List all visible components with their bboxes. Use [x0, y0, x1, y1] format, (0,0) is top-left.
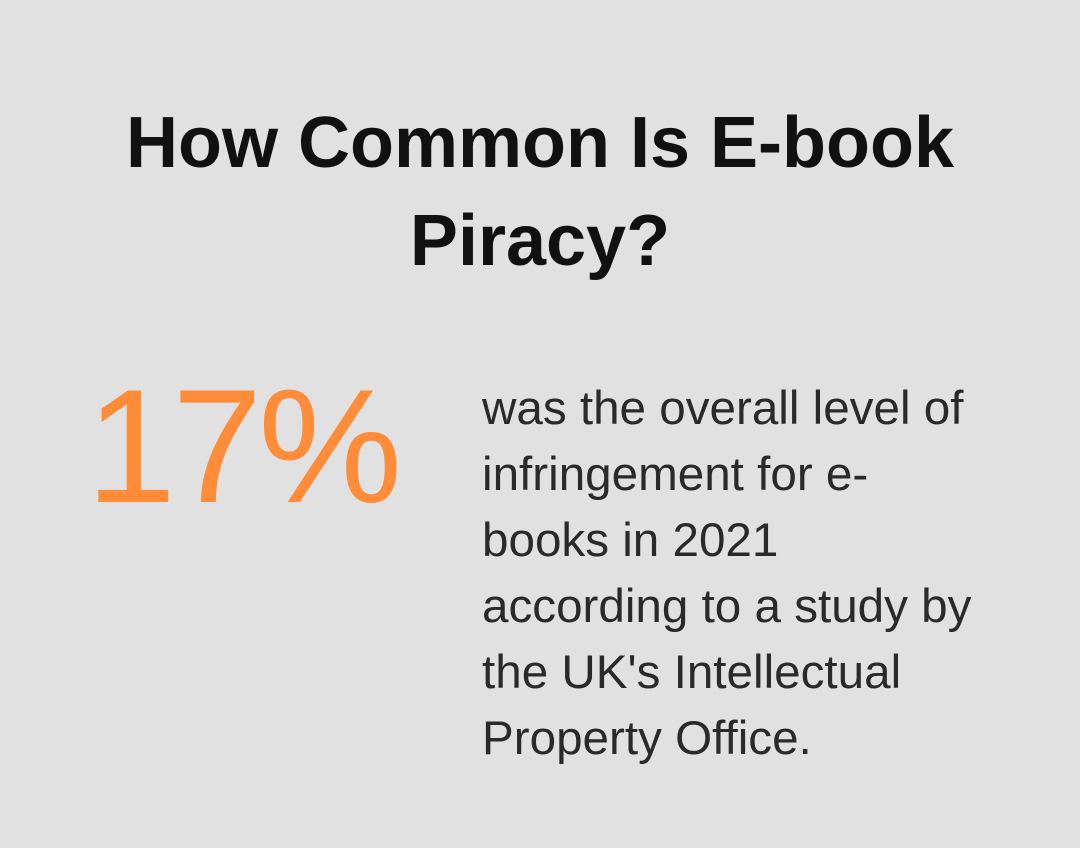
title [126, 103, 954, 281]
description text: infringement for e- [482, 448, 868, 501]
title: Piracy? [410, 201, 670, 281]
description text [482, 382, 972, 765]
description text: according to a study by [482, 580, 971, 633]
big stat: 17%: 17% [86, 356, 398, 537]
description text: the UK's Intellectual [482, 646, 901, 699]
description text: was the overall level of [482, 382, 963, 435]
description text: books in 2021 [482, 514, 778, 567]
description text: Property Office. [482, 712, 812, 765]
title: How Common Is E-book [126, 103, 954, 183]
